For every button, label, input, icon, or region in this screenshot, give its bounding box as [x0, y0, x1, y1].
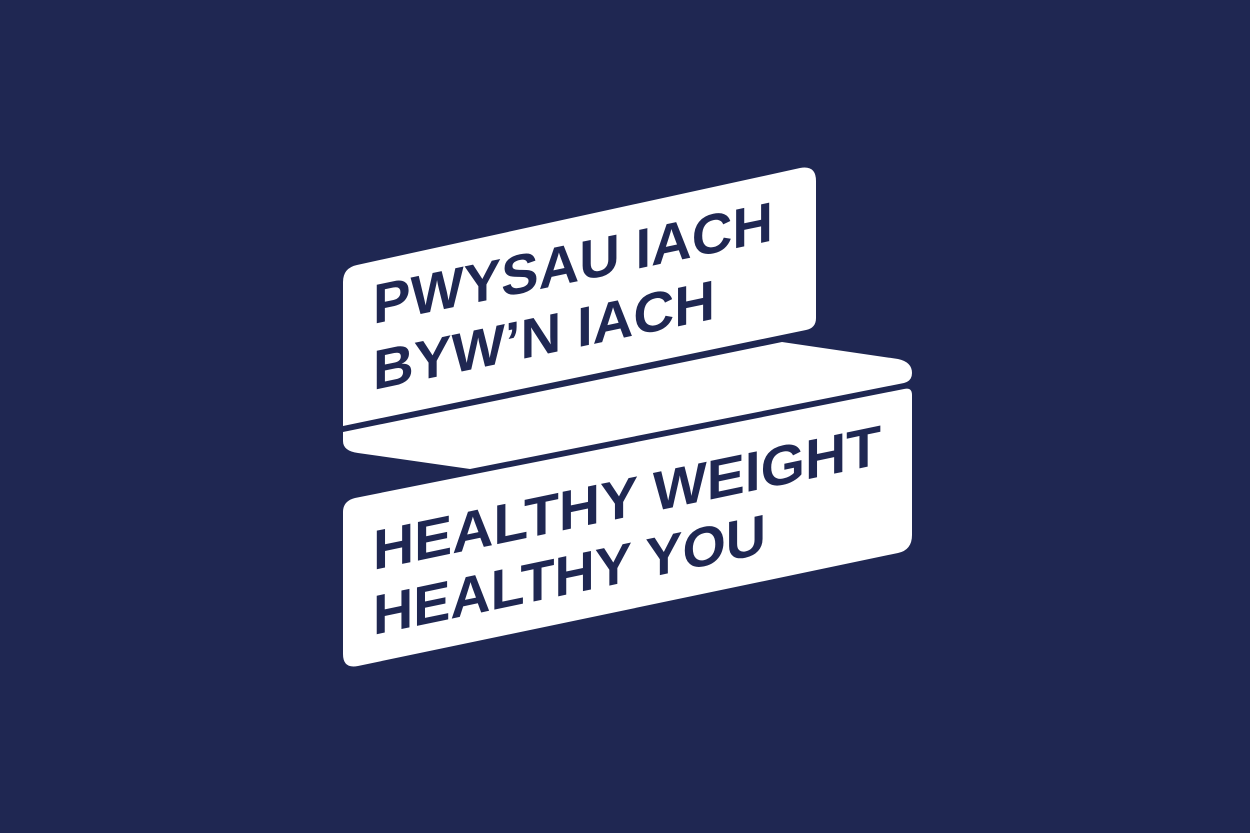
ribbon: bottom panel	[343, 389, 912, 666]
logo: ribbon	[343, 168, 912, 667]
ribbon: fold	[343, 342, 912, 469]
english title: HEALTHY WEIGHT	[373, 413, 881, 582]
english title: HEALTHY YOU	[373, 502, 766, 647]
welsh title: PWYSAU IACH	[373, 190, 773, 336]
welsh title	[373, 190, 773, 402]
welsh title: BYW’N IACH	[373, 268, 715, 402]
ribbon: top panel	[343, 168, 816, 426]
